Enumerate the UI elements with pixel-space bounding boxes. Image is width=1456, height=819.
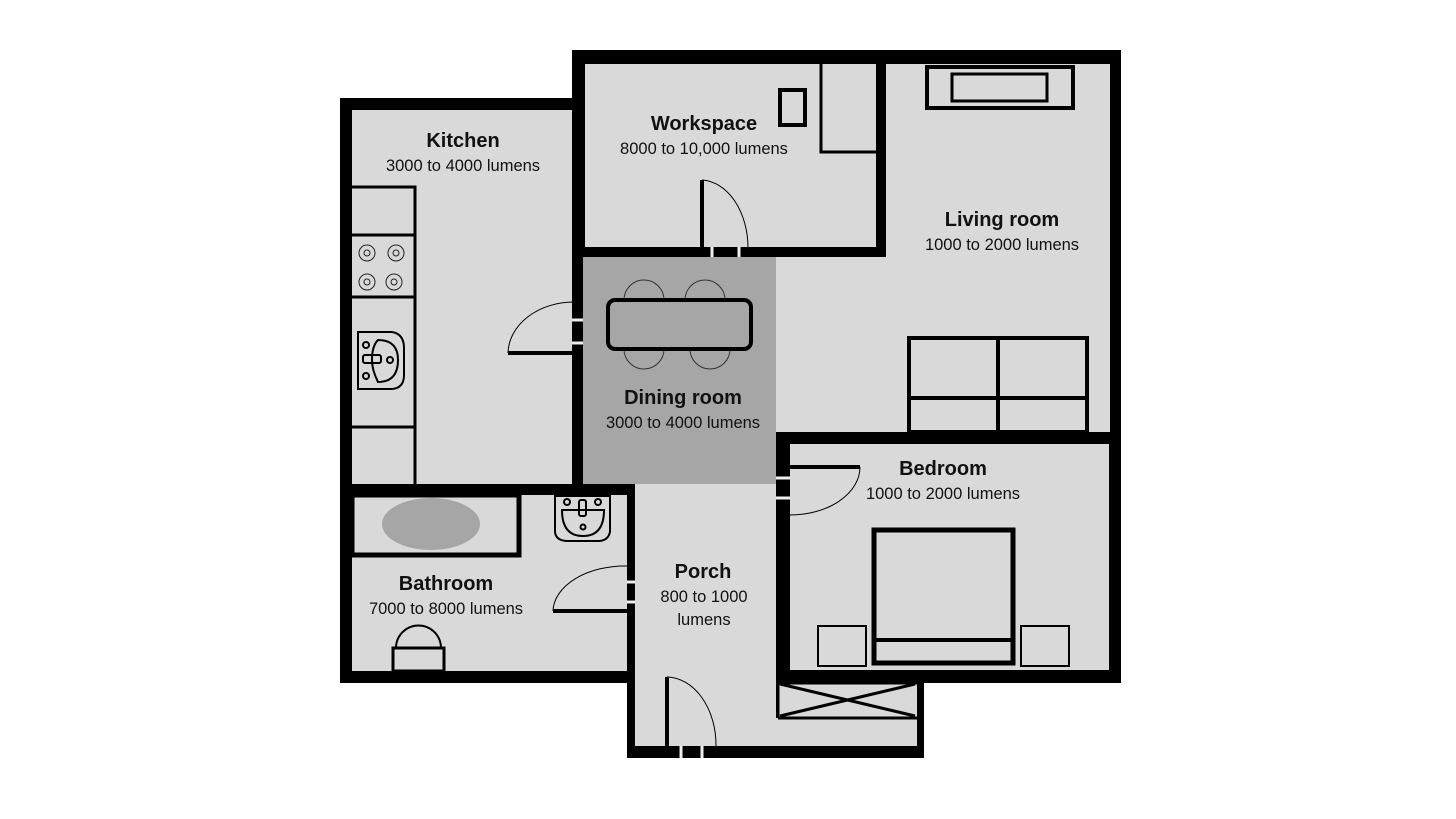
kitchen door: [508, 302, 583, 353]
floor plan: [340, 50, 1121, 758]
icon: kitchen sink: [358, 332, 404, 389]
icon: bathroom sink: [555, 496, 610, 541]
label: porch: Porch: [675, 561, 731, 583]
label: kitchen: Kitchen: [426, 130, 500, 152]
label: bedroom: [866, 458, 1020, 503]
label: porch: [660, 561, 748, 629]
room: bedroom: [776, 444, 1109, 670]
label: bathroom: 7000 to 8000 lumens: [369, 600, 523, 618]
label: living room: [925, 209, 1079, 254]
label: workspace: 8000 to 10,000 lumens: [620, 140, 788, 158]
label: bathroom: [369, 573, 523, 618]
room: dining room: [583, 257, 776, 484]
icon: toilet: [393, 626, 444, 671]
label: living room: 1000 to 2000 lumens: [925, 236, 1079, 254]
label: bedroom: Bedroom: [899, 458, 987, 480]
label: bathroom: Bathroom: [399, 573, 493, 595]
label: porch: 800 to 1000: [660, 588, 748, 606]
label: dining room: [606, 387, 760, 432]
room: porch: [635, 484, 917, 758]
label: dining room: Dining room: [624, 387, 742, 409]
label: living room: Living room: [945, 209, 1059, 231]
room: kitchen: [352, 110, 583, 484]
label: workspace: Workspace: [651, 113, 757, 135]
label: dining room: 3000 to 4000 lumens: [606, 414, 760, 432]
label: workspace: [620, 113, 788, 158]
label: kitchen: [386, 130, 540, 175]
label: porch: lumens: [677, 611, 731, 629]
label: bedroom: 1000 to 2000 lumens: [866, 485, 1020, 503]
room: living room: [776, 64, 1110, 432]
label: kitchen: 3000 to 4000 lumens: [386, 157, 540, 175]
room: workspace: [585, 64, 876, 257]
room: bathroom: [352, 495, 635, 671]
walls: [340, 50, 1121, 758]
